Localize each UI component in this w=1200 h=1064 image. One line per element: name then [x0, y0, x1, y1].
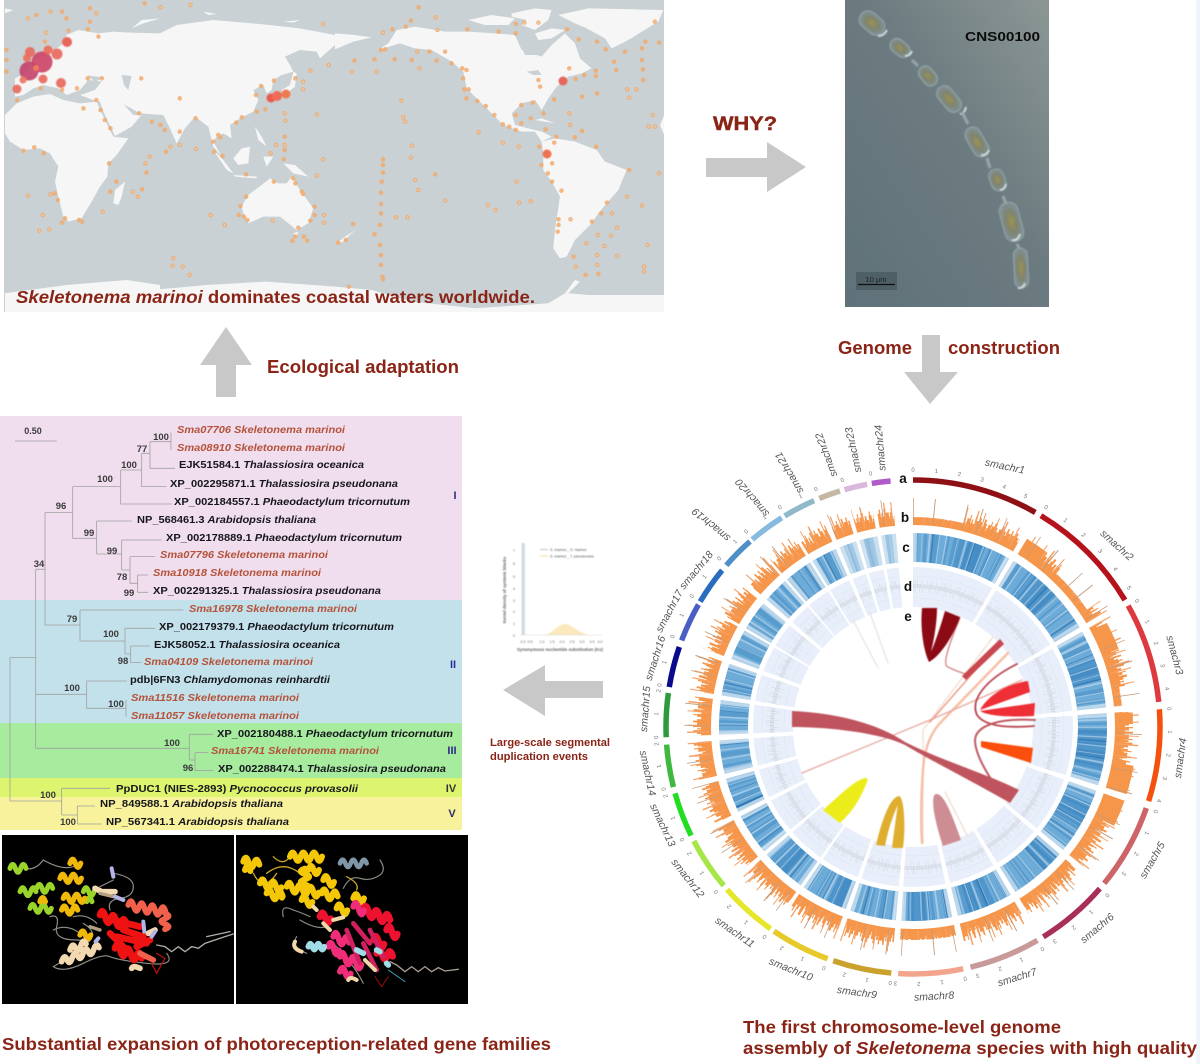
heading: WHY?: WHY? [713, 114, 777, 135]
clade I labels: XP_002178889.1 Phaeodactylum tricornutum [166, 532, 402, 544]
chromosome names: smachr22 [813, 431, 840, 478]
clade II labels: XP_002179379.1 Phaeodactylum tricornutum [159, 621, 394, 633]
chromosome tick labels: 1 [679, 612, 686, 618]
chromosome tick labels: 2 [1164, 753, 1171, 758]
chromosome tick labels: 0 [1151, 809, 1158, 814]
chromosome names: smachr21 [773, 450, 806, 496]
map land east of the date line [335, 8, 665, 312]
chromosome tick labels: 2 [997, 964, 1002, 971]
chromosome tick labels: 2 [654, 741, 661, 746]
clade II labels: Sma11516 Skeletonema marinoi [131, 692, 300, 704]
chromosome tick labels: 1 [1018, 956, 1024, 963]
low-density zones erased [691, 505, 1135, 949]
density axes text: 1.5 [550, 640, 554, 644]
chromosome tick labels: 2 [1132, 851, 1139, 857]
chromosome names: smachr18 [677, 549, 716, 592]
chromosome tick labels: 0 [821, 963, 827, 970]
chromosome tick labels: 1 [798, 493, 804, 500]
chromosome tick labels: 1 [1087, 908, 1094, 915]
clade numerals: V [448, 808, 456, 820]
clade III labels: XP_002288474.1 Thalassiosira pseudonana [218, 763, 446, 775]
support values: 100 [164, 738, 180, 749]
support values: 100 [97, 474, 113, 485]
track e: synteny links [792, 608, 1035, 848]
chromosome tick labels: 1 [1166, 730, 1172, 734]
chromosome names: smachr24 [873, 424, 889, 471]
chromosome names: smachr9 [836, 984, 878, 1001]
density axes text: 3.5 [590, 640, 594, 644]
density axes text: 2 [513, 610, 515, 614]
chromosome tick labels: 0 [962, 974, 967, 981]
support values: 99 [124, 588, 134, 599]
chromosome names: smachr19 [690, 505, 733, 544]
density axes text: 0.0 [520, 640, 526, 644]
chromosome names: smachr7 [996, 966, 1039, 989]
clade numerals: III [447, 745, 457, 757]
chromosome tick labels: 1 [657, 763, 663, 768]
support values: 77 [137, 444, 147, 455]
support values: 78 [117, 572, 127, 583]
map abundance bubbles [12, 37, 568, 158]
chromosome tick labels: 5 [1022, 493, 1029, 501]
chromosome tick labels: 3 [1051, 937, 1057, 944]
chart: circos genome plot [637, 424, 1189, 1004]
arrow: map to micrograph [706, 142, 806, 192]
chromosome tick labels: 4 [1111, 566, 1119, 573]
track a: chromosome ring [666, 480, 1160, 974]
support values: 100 [153, 432, 169, 443]
text: large-scale segmental duplication: Large-scale segmental [490, 737, 610, 749]
chromosome tick labels: 0 [744, 529, 750, 536]
density legend: S. marinoi _ T. pseudonana [550, 554, 594, 558]
clade numerals: I [453, 490, 457, 502]
track c: blue heatmap [734, 548, 1092, 906]
density axes text: 3.0 [580, 640, 584, 644]
chromosome tick labels: 2 [1069, 923, 1076, 931]
chromosome tick labels: 0 [657, 682, 664, 687]
chromosome tick labels: 1 [1142, 830, 1150, 836]
density legend [540, 548, 594, 558]
map caption: Skeletonema marinoi dominates coastal waters worldwide. [16, 287, 535, 307]
density spike and bump [520, 543, 602, 635]
chromosome tick labels: 3 [893, 979, 897, 986]
caption: first chromosome-level genome: The first chromosome-level genome [743, 1017, 1061, 1037]
support values: 99 [84, 528, 94, 539]
micrograph background [845, 0, 1049, 307]
chromosome tick labels: 0 [1038, 945, 1045, 952]
chromosome tick labels: 3 [1160, 776, 1167, 781]
clade I labels: Sma07706 Skeletonema marinoi [177, 424, 346, 436]
chromosome tick labels: 3 [1119, 870, 1127, 877]
chromosome tick labels: 4 [1163, 687, 1169, 691]
track letters a to e: d [904, 579, 912, 594]
clade I labels: NP_568461.3 Arabidopsis thaliana [137, 514, 316, 526]
clade II labels: pdb|6FN3 Chlamydomonas reinhardtii [130, 674, 331, 686]
chromosome names: smachr2 [1098, 528, 1136, 564]
protein structure left [2, 835, 234, 1004]
clade IV and V labels: NP_849588.1 Arabidopsis thaliana [100, 798, 283, 810]
density axes text: 0 [513, 634, 515, 638]
chromosome names: smachr17 [653, 587, 686, 634]
chromosome names: smachr8 [914, 990, 955, 1004]
clade II labels [130, 603, 394, 722]
panel: protein structures [2, 835, 468, 1004]
chromosome tick labels [654, 468, 1172, 986]
track letters a to e: e [904, 609, 912, 624]
chromosome names: smachr15 [638, 685, 653, 732]
support values [34, 432, 193, 828]
density axes text: Synonymous nucleotide substitution (Ks) [517, 647, 604, 652]
track letters a to e: a [899, 471, 907, 486]
clade I labels: EJK51584.1 Thalassiosira oceanica [179, 459, 364, 471]
density axes text [502, 549, 604, 652]
track letters a to e [899, 471, 912, 624]
support values: 100 [121, 460, 137, 471]
chromosome tick labels: 0 [716, 555, 724, 562]
clade numerals [446, 490, 457, 820]
density axes text: 2.0 [560, 640, 564, 644]
density axes text: 2.5 [570, 640, 574, 644]
chromosome tick labels: 2 [726, 902, 733, 909]
chromosome tick labels: 2 [686, 850, 694, 856]
protein structure right [236, 835, 468, 1004]
chromosome tick labels: 3 [1158, 664, 1165, 669]
chromosome tick labels: 0 [777, 504, 784, 511]
chromosome tick labels: 1 [934, 469, 939, 475]
caption: gene families: Substantial expansion of photoreception-related gene families [2, 1034, 551, 1054]
support values: 100 [60, 817, 76, 828]
chromosome tick labels: 3 [1096, 548, 1103, 556]
chromosome tick labels: 1 [939, 978, 944, 985]
panel: world map [4, 0, 665, 312]
track d: line track [762, 576, 1064, 878]
support values: 100 [103, 629, 119, 640]
chromosome tick labels: 0 [840, 477, 846, 484]
clade numerals: IV [446, 783, 457, 795]
chromosome tick labels: 1 [733, 538, 740, 546]
panel: micrograph [845, 0, 1049, 307]
chromosome tick labels: 0 [713, 888, 720, 894]
chromosome names: smachr6 [1078, 911, 1117, 946]
track letters a to e: b [901, 510, 909, 525]
map ocean [4, 0, 664, 312]
chromosome names: smachr5 [1137, 840, 1168, 881]
pale small chromosome sectors [734, 548, 1092, 906]
chromosome tick labels: 1 [1062, 518, 1069, 525]
support values: 99 [107, 546, 117, 557]
chromosome names: smachr12 [669, 857, 706, 900]
clade numerals: II [450, 659, 456, 671]
text: large-scale segmental duplication: duplication events [490, 751, 588, 763]
thick zones added [701, 515, 1125, 939]
clade II labels: Sma16978 Skeletonema marinoi [189, 603, 358, 615]
tree branches [10, 433, 213, 824]
scale bar: 10 μm [866, 275, 886, 284]
chromosome tick labels: 0 [1165, 707, 1172, 711]
clade I labels: XP_002184557.1 Phaeodactylum tricornutum [174, 496, 410, 508]
chromosome names: smachr10 [767, 955, 815, 984]
heading: Genome construction: construction [948, 338, 1060, 358]
right edge strip [1196, 0, 1200, 1064]
chromosome tick labels: 0 [814, 486, 820, 493]
support values: 100 [64, 683, 80, 694]
strain label: CNS00100 [965, 30, 1040, 44]
chromosome tick labels: 2 [663, 793, 670, 798]
support values: 96 [183, 763, 193, 774]
chromosome tick labels: 0 [1133, 598, 1140, 605]
chart: Ks density plot [502, 543, 604, 652]
chromosome tick labels: 0 [689, 593, 696, 600]
chromosome tick labels: 1 [670, 815, 677, 821]
chromosome tick labels: 0 [654, 735, 660, 739]
map sampling dots [6, 3, 659, 287]
chromosome tick labels: 0 [661, 786, 668, 791]
chromosome tick labels: 0 [670, 634, 677, 640]
chromosome tick labels: 4 [1001, 484, 1007, 491]
map land west of the date line [5, 8, 335, 312]
pale sector ends [734, 548, 1092, 906]
clade I labels: Sma07796 Skeletonema marinoi [160, 549, 329, 561]
chain of diatom cells [855, 7, 1029, 288]
arrow: ecological adaptation up [200, 327, 252, 397]
chromosome names: smachr1 [984, 457, 1026, 477]
chromosome tick labels: 1 [762, 514, 769, 521]
density axes text: 3 [513, 599, 515, 603]
clade III labels [211, 728, 453, 775]
chromosome names: smachr4 [1172, 737, 1189, 779]
chromosome tick labels: 3 [979, 477, 985, 484]
clade II labels: Sma11057 Skeletonema marinoi [131, 710, 300, 722]
chromosome tick labels: 0 [869, 471, 874, 478]
chromosome tick labels: 5 [1125, 585, 1132, 592]
chromosome names [637, 424, 1189, 1004]
chromosome tick labels: 1 [662, 659, 669, 665]
chromosome tick labels: 2 [656, 688, 663, 693]
chromosome tick labels: 1 [654, 712, 660, 716]
chromosome tick labels: 3 [975, 971, 980, 978]
clade III labels: Sma16741 Skeletonema marinoi [211, 745, 380, 757]
chromosome tick labels: 0 [888, 979, 892, 985]
support values: 79 [67, 614, 77, 625]
chromosome tick labels: 0 [911, 468, 915, 474]
chromosome tick labels: 1 [799, 954, 806, 961]
density axes text: 4.0 [598, 640, 602, 644]
clade II labels: EJK58052.1 Thalassiosira oceanica [154, 639, 340, 651]
heading: Genome construction [838, 338, 1060, 358]
clade I labels: Sma10918 Skeletonema marinoi [153, 567, 322, 579]
heading: Genome construction: Genome [838, 338, 912, 358]
density legend: S. marinoi _ S. marinoi [550, 548, 587, 552]
chromosome names: smachr3 [1163, 634, 1185, 676]
chromosome names: smachr14 [637, 749, 658, 797]
support values: 96 [56, 501, 66, 512]
chromosome names: smachr20 [733, 476, 772, 519]
chromosome names: smachr23 [843, 426, 864, 474]
chromosome tick labels: 0 [761, 932, 768, 939]
sector gaps between chromosomes [736, 550, 1090, 904]
support values: 34 [34, 559, 45, 570]
scale label: 0.50 [24, 426, 42, 436]
density axes text: 1.0 [540, 640, 544, 644]
support values: 98 [118, 656, 128, 667]
clade II labels: Sma04109 Skeletonema marinoi [144, 656, 314, 668]
clade IV and V labels: PpDUC1 (NIES-2893) Pycnococcus provasolii [116, 783, 359, 795]
chromosome names: smachr11 [713, 915, 757, 950]
caption: first chromosome-level genome: assembly of Skeletonema species with high quality [743, 1038, 1197, 1058]
heading: Ecological adaptation: Ecological adaptation [267, 357, 459, 377]
support values: 100 [108, 699, 124, 710]
clade I labels [137, 424, 410, 597]
clade I labels: Sma08910 Skeletonema marinoi [177, 442, 346, 454]
scale bar [856, 272, 897, 290]
density axes text: 4 [513, 587, 515, 591]
panel: phylogenetic tree [0, 416, 462, 830]
arrow: micrograph to genome [904, 335, 958, 404]
chromosome tick labels: 0 [1043, 505, 1049, 512]
clade I labels: XP_002291325.1 Thalassiosira pseudonana [153, 585, 381, 597]
clade IV and V labels: NP_567341.1 Arabidopsis thaliana [106, 816, 289, 828]
clade backgrounds [0, 416, 462, 830]
track b: histogram [689, 503, 1137, 951]
density axes text: 6 [513, 562, 515, 566]
density axes text: 5 [513, 575, 515, 579]
density axes text: 7 [513, 549, 515, 553]
clade III labels: XP_002180488.1 Phaeodactylum tricornutum [217, 728, 453, 740]
chromosome tick labels: 1 [702, 574, 709, 580]
arrow: genome to tree [503, 665, 603, 716]
text: large-scale segmental duplication [490, 737, 610, 763]
track letters a to e: c [902, 540, 910, 555]
chromosome tick labels: 4 [1155, 798, 1162, 804]
chromosome tick labels: 2 [957, 472, 962, 479]
clade IV and V labels [100, 783, 359, 828]
clade I labels: XP_002295871.1 Thalassiosira pseudonana [170, 478, 398, 490]
caption: first chromosome-level genome [743, 1017, 1197, 1058]
chromosome tick labels: 1 [743, 918, 750, 925]
chromosome tick labels: 2 [1152, 641, 1159, 647]
chromosome tick labels: 1 [864, 976, 869, 982]
chromosome tick labels: 1 [1143, 619, 1150, 625]
chromosome tick labels: 2 [779, 943, 785, 951]
chromosome names: smachr16 [643, 634, 669, 682]
chromosome tick labels: 2 [1080, 532, 1087, 539]
chromosome names: smachr13 [647, 802, 678, 849]
density axes text: 1 [513, 622, 515, 626]
density axes text: 0.5 [528, 640, 532, 644]
chromosome tick labels: 2 [916, 980, 921, 986]
chromosome tick labels: 0 [679, 836, 686, 842]
density axes text: Kernel density of syntenic blocks [502, 556, 507, 623]
chromosome tick labels: 0 [1103, 891, 1110, 898]
chromosome tick labels: 1 [699, 869, 706, 876]
support values: 100 [40, 790, 56, 801]
chromosome tick labels: 2 [842, 970, 847, 977]
